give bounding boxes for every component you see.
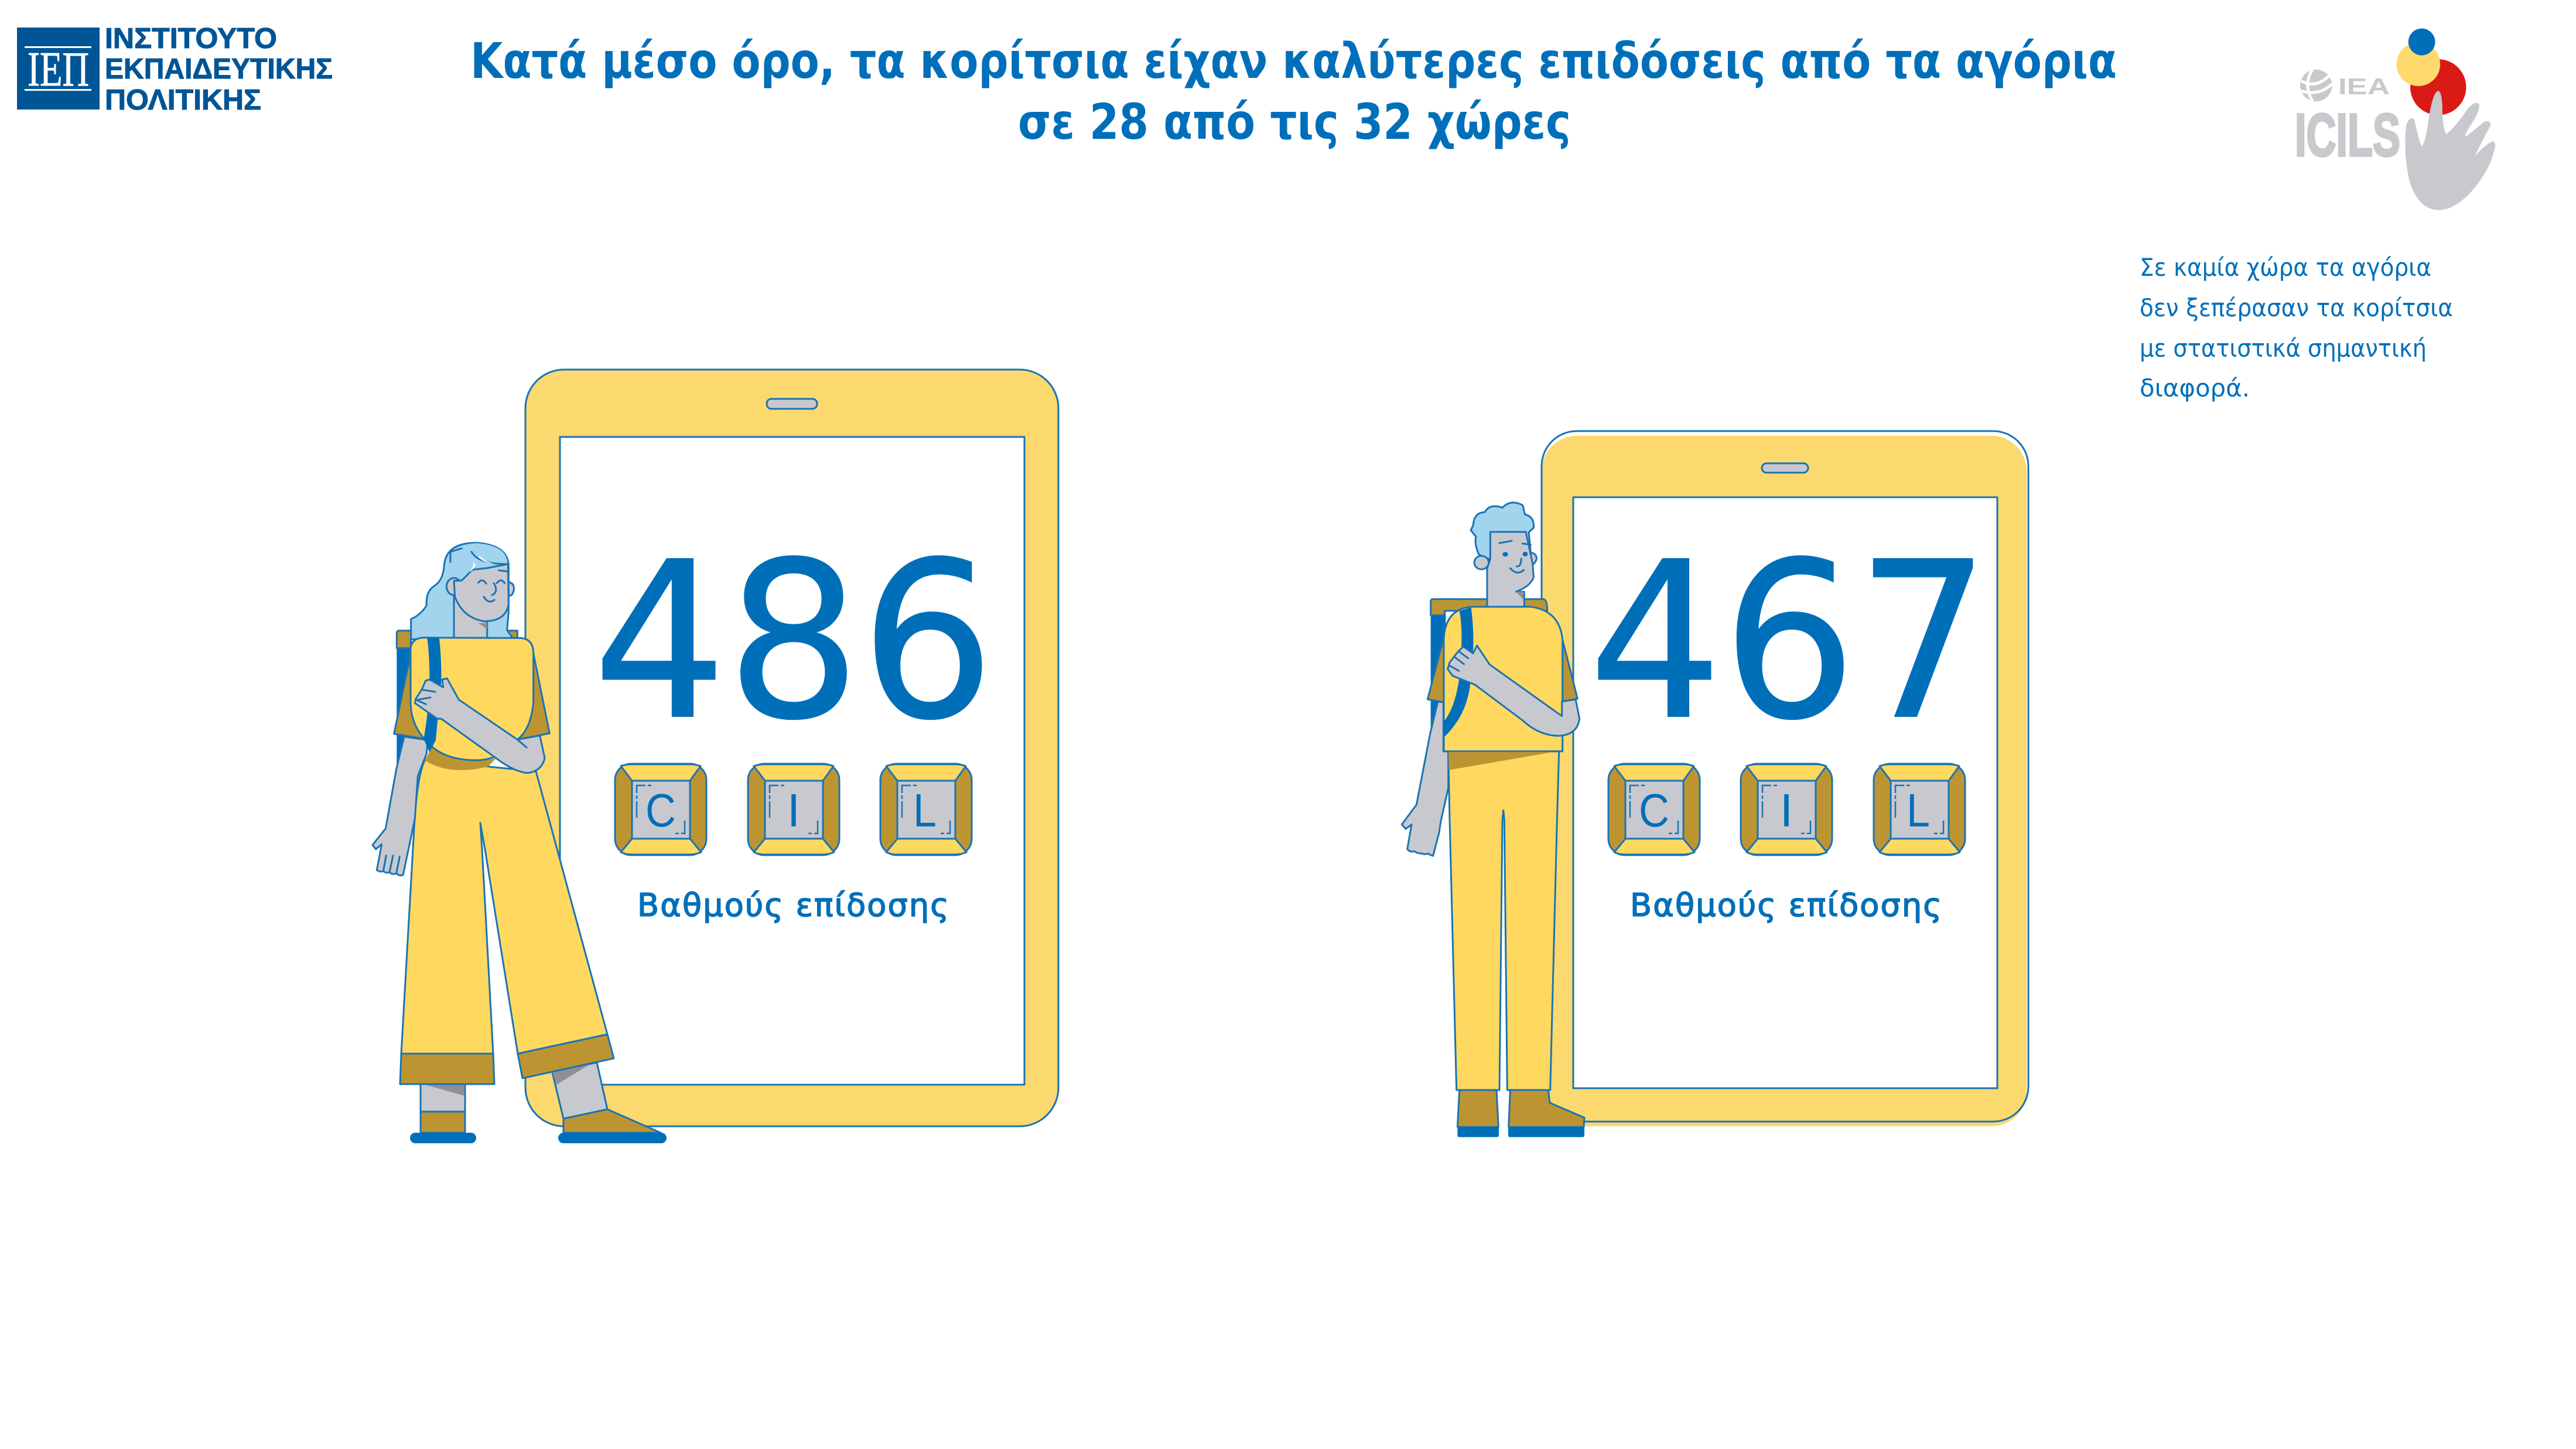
side note: με στατιστικά σημαντική bbox=[2140, 334, 2427, 363]
girl: right foot bbox=[518, 1034, 667, 1143]
logo: Institute of Educational Policy: ΙΕΠ bbox=[28, 42, 89, 97]
key row: C I L: C bbox=[1639, 784, 1669, 836]
key row: C I L: I bbox=[787, 784, 800, 836]
boy: shirt and arm bbox=[1444, 607, 1580, 770]
key row: C I L: I bbox=[1780, 784, 1793, 836]
logo: Institute of Educational Policy bbox=[17, 23, 333, 116]
key row: C I L: C bbox=[645, 784, 676, 836]
girl: trousers bbox=[401, 760, 607, 1054]
girl: left foot bbox=[400, 1054, 494, 1143]
girl: torso and arms bbox=[373, 638, 549, 876]
logo: Institute of Educational Policy: ΕΚΠΑΙΔΕΥΤΙΚΗΣ bbox=[105, 53, 333, 85]
girl: waist shade bbox=[425, 748, 497, 770]
key row: C I L: L bbox=[913, 784, 937, 836]
side note bbox=[2140, 253, 2453, 402]
logo: Institute of Educational Policy: ΠΟΛΙΤΙΚΗΣ bbox=[105, 84, 261, 116]
caption: performance points: Βαθμούς επίδοσης bbox=[1630, 887, 1942, 924]
boy: trousers and shoes bbox=[1402, 702, 1584, 1137]
side note: διαφορά. bbox=[2140, 374, 2250, 402]
title bbox=[470, 32, 2117, 151]
logo: IEA ICILS hand and circles: IEA bbox=[2338, 74, 2390, 100]
title: σε 28 από τις 32 χώρες bbox=[1018, 93, 1571, 151]
caption: performance points: Βαθμούς επίδοσης bbox=[637, 887, 949, 924]
score: 486: 486 bbox=[593, 516, 995, 768]
illustration: boy with backpack bbox=[1402, 503, 1584, 1137]
score: 467: 467 bbox=[1588, 516, 1990, 768]
key row: C I L bbox=[1608, 764, 1965, 855]
logo: IEA ICILS hand and circles bbox=[2295, 29, 2495, 210]
side note: δεν ξεπέρασαν τα κορίτσια bbox=[2140, 293, 2453, 322]
logo: IEA ICILS hand and circles: ICILS bbox=[2295, 101, 2400, 169]
panel: boys tablet bbox=[1542, 431, 2028, 1126]
key row: C I L bbox=[615, 764, 972, 855]
logo: Institute of Educational Policy: ΙΝΣΤΙΤΟΥΤΟ bbox=[105, 23, 277, 54]
panel: girls tablet bbox=[525, 370, 1058, 1126]
key row: C I L: L bbox=[1907, 784, 1930, 836]
side note: Σε καμία χώρα τα αγόρια bbox=[2140, 253, 2431, 282]
illustration: girl with backpack bbox=[373, 543, 667, 1143]
title: Κατά μέσο όρο, τα κορίτσια είχαν καλύτερες επιδόσεις από τα αγόρια bbox=[470, 32, 2117, 90]
